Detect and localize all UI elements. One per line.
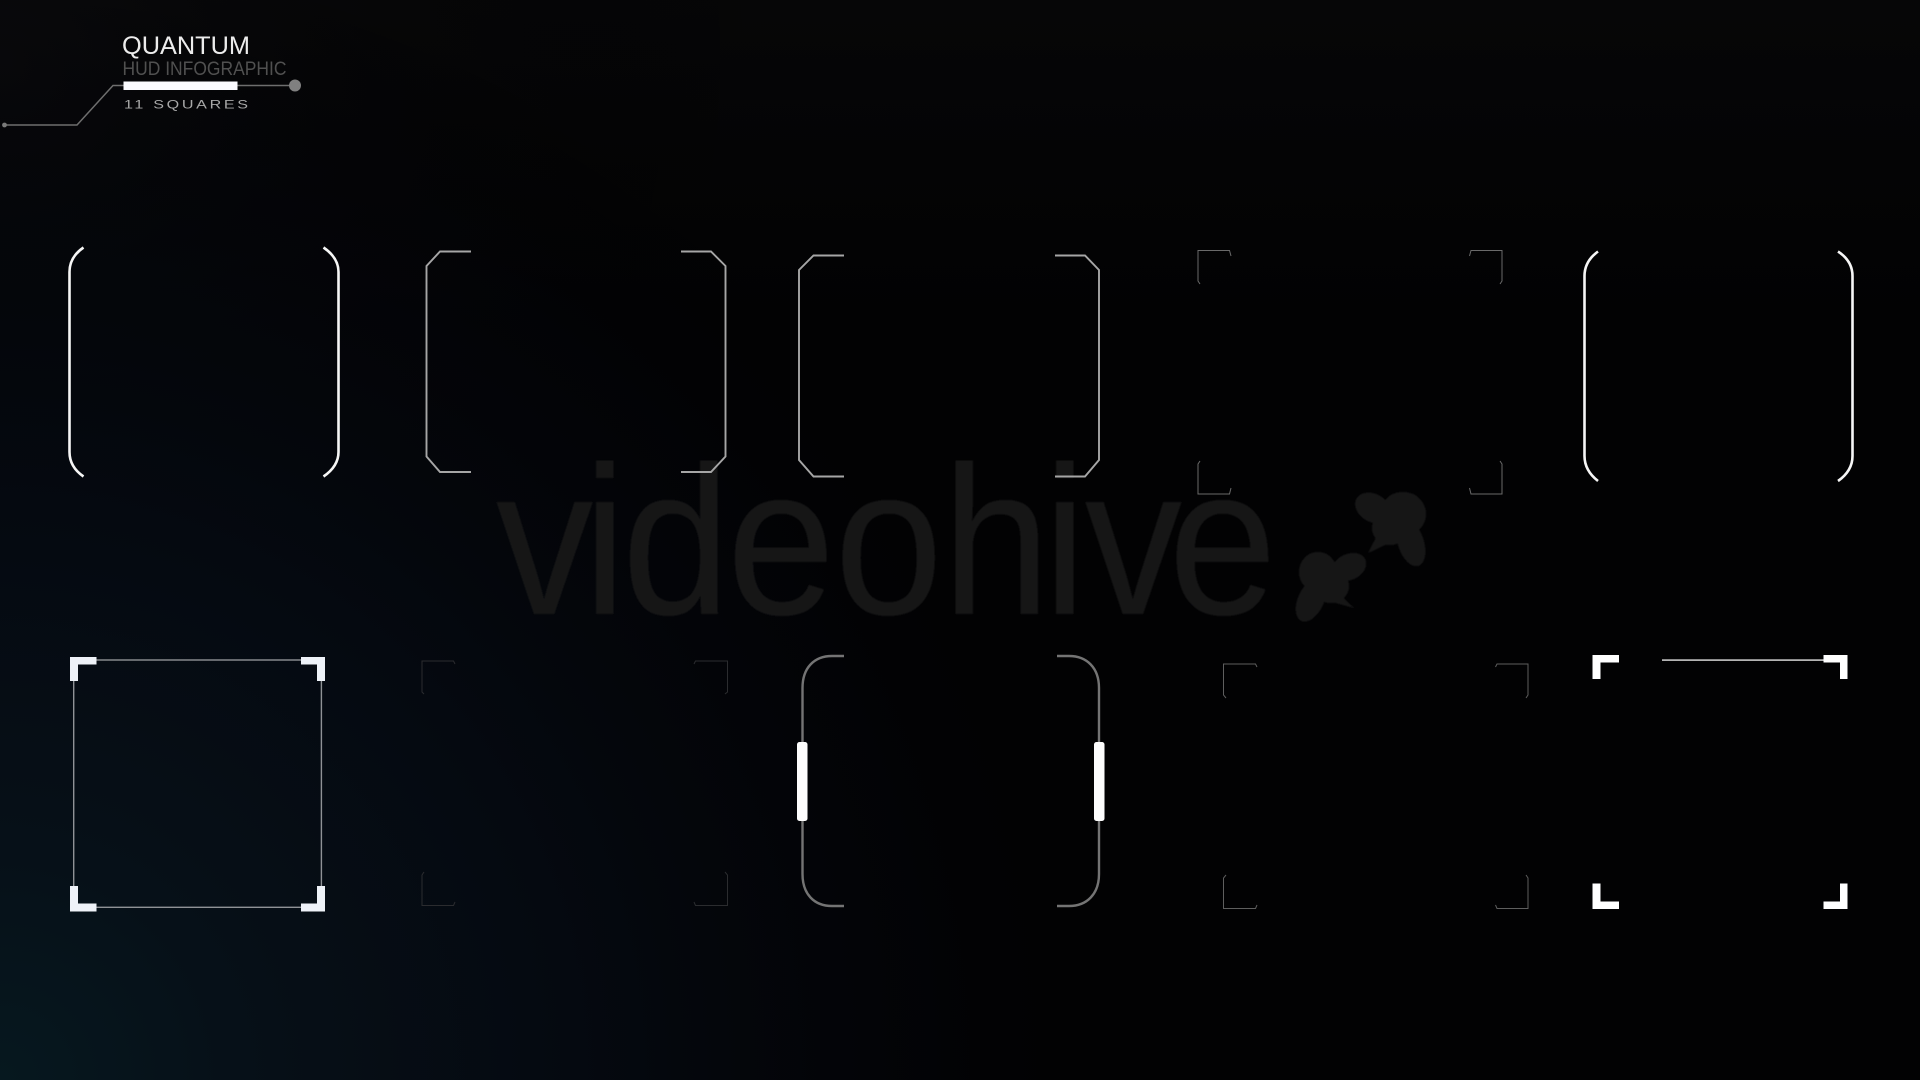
square 1: rounded brackets (70, 248, 338, 476)
square 8: rounded brackets with bars (797, 656, 1104, 906)
square 7: dim corners (422, 661, 728, 906)
left bar (797, 742, 808, 821)
title block (2, 32, 301, 127)
caption: 11 SQUARES (124, 98, 248, 111)
square 3: chamfered brackets (799, 256, 1099, 476)
title bar (124, 82, 238, 90)
frame (74, 660, 321, 907)
square 4: thin corners (1198, 250, 1502, 494)
right bar (1094, 742, 1104, 821)
connector line (4, 86, 295, 125)
small node (2, 123, 7, 127)
subheading: HUD INFOGRAPHIC (122, 58, 286, 80)
square 5: rounded brackets (1584, 252, 1852, 481)
corners (70, 657, 325, 912)
square 6: full frame with corners (70, 657, 325, 912)
corners (1592, 655, 1848, 909)
heading: quantum: QUANTUM (122, 32, 250, 60)
watermark: videohive: videohive (496, 424, 1277, 660)
square 9: thin corners (1224, 664, 1528, 908)
square 10: bold corners with top line (1592, 655, 1848, 909)
square 2: chamfered brackets (426, 252, 726, 472)
brackets (802, 656, 1099, 906)
icon: bee logo (1289, 486, 1431, 626)
large node (289, 80, 301, 92)
top line (1662, 659, 1825, 661)
